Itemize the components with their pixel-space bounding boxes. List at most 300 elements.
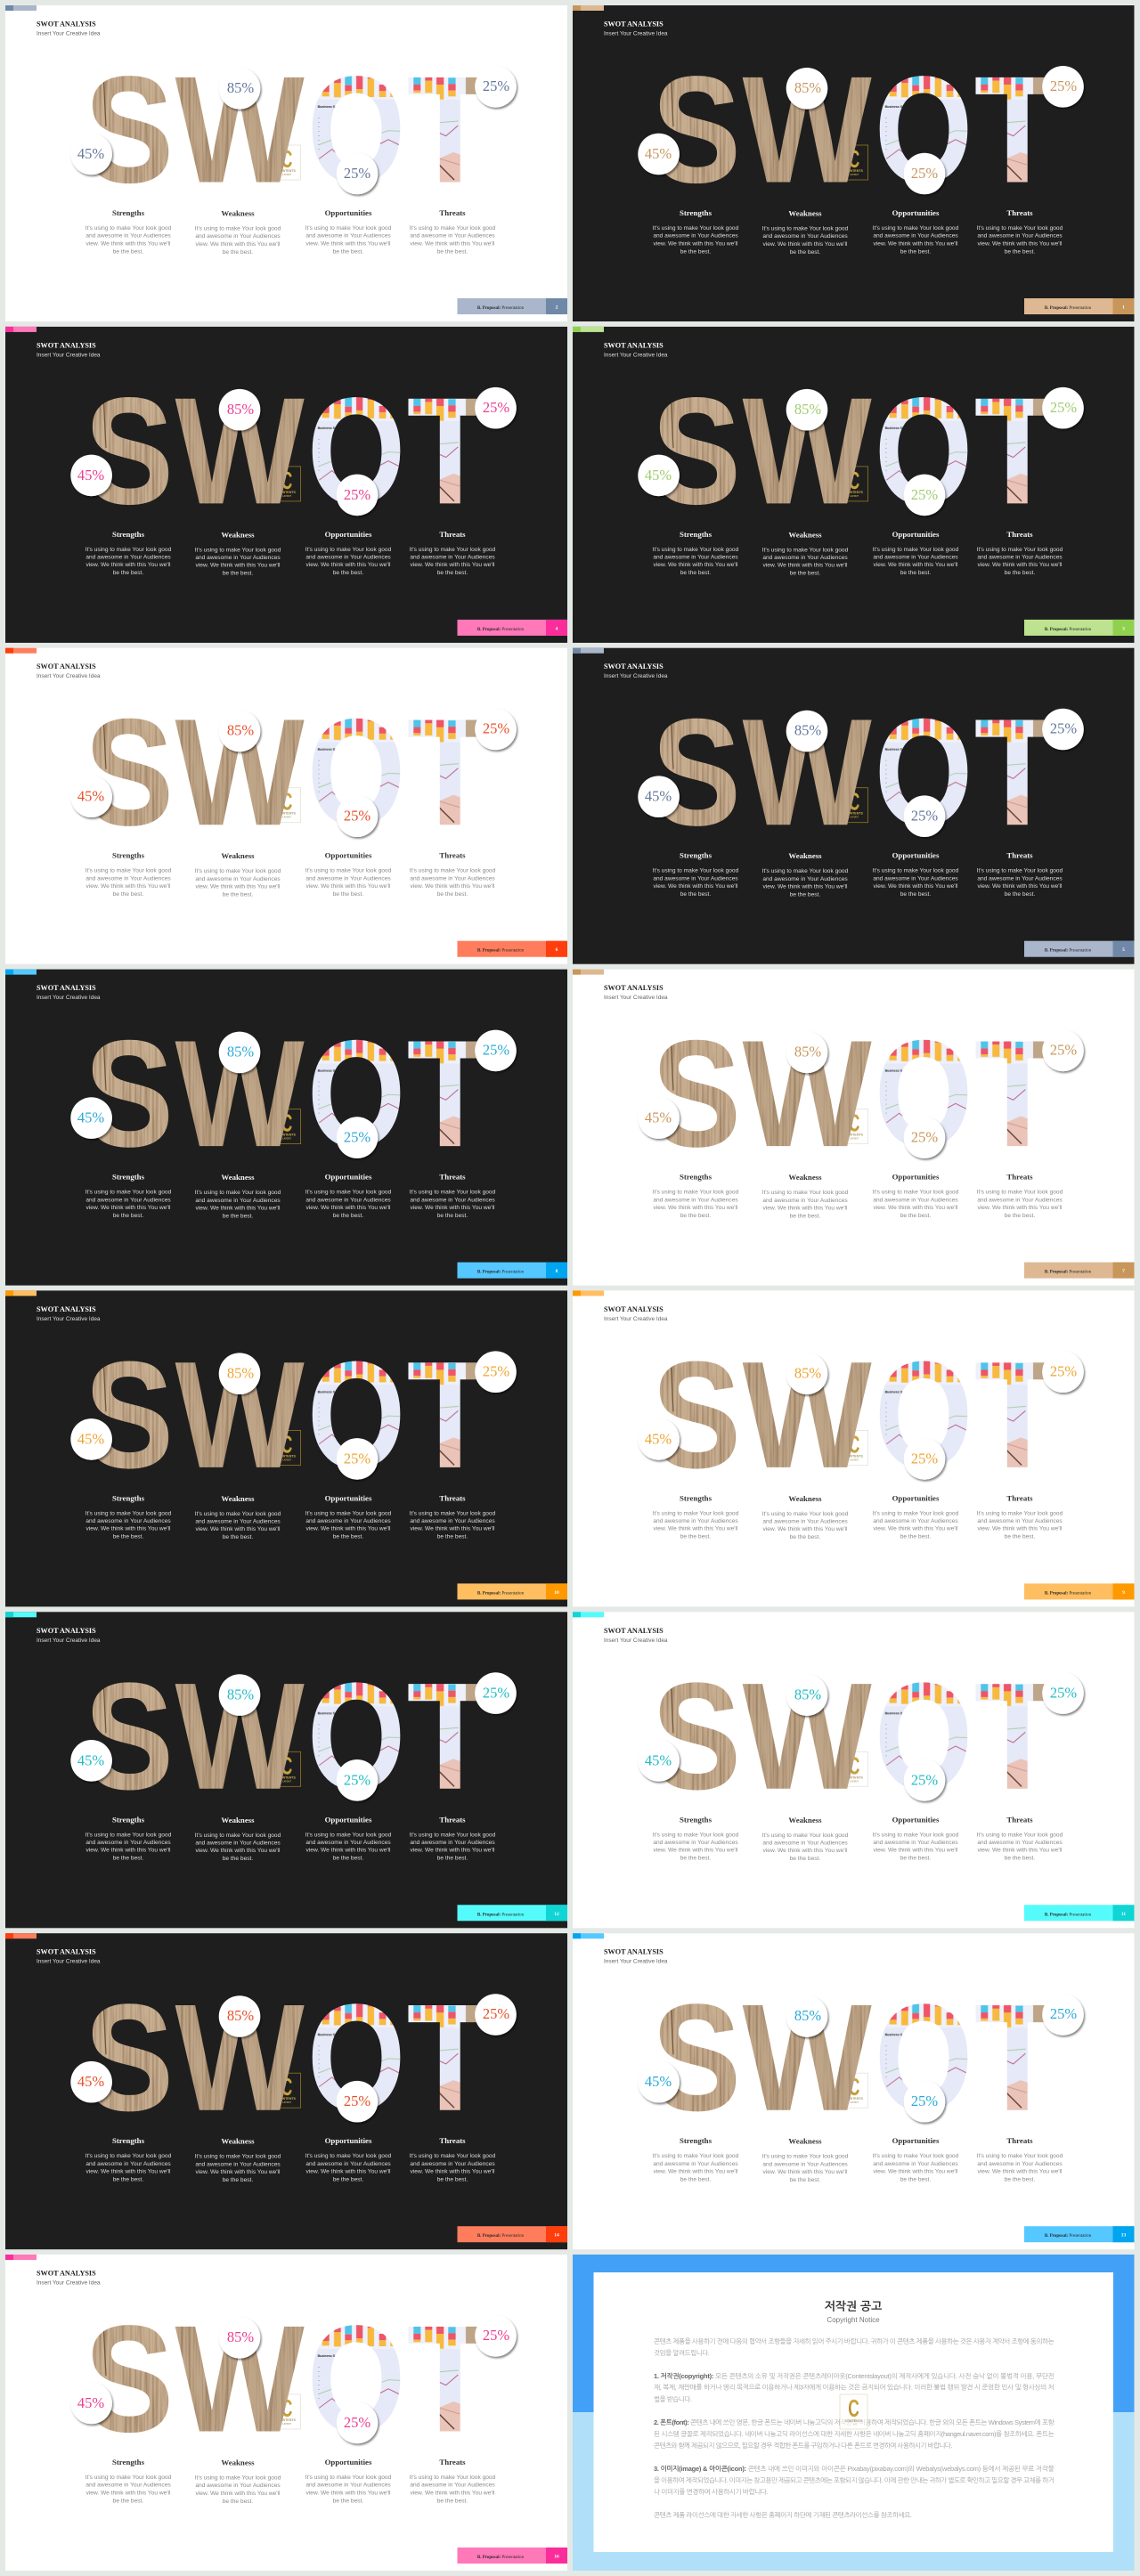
column: Opportunities [873,530,959,576]
footer tag [1024,2226,1135,2242]
column: Weakness: It's using to make Your look good [195,2475,281,2481]
SWOT letters: O [307,367,405,536]
footer tag [458,620,567,636]
column: Opportunities: Opportunities [325,1493,372,1502]
SWOT letters: W [175,1010,305,1179]
column: Threats: and awesome in Your Audiences [977,1197,1063,1203]
corner tag [5,648,37,654]
title: SWOT ANALYSIS [604,662,664,670]
intro paragraph: 콘텐츠 제품을 사용하기 전에 다음의 협약서 조항들을 자세히 읽어 주시기 바랍니다. 귀하가 이 콘텐츠 제품을 사용하는 것은 사용자 계약서 조항에 동의하는 [654,2337,1054,2345]
footer tag [1024,298,1135,314]
column: Opportunities: Opportunities [892,1173,940,1182]
column: Opportunities: be the best. [333,1534,363,1540]
circle: 45%: 45% [77,788,104,805]
column: Strengths: view. We think with this You we'll [86,883,171,890]
logo watermark: CONTENTS [278,812,296,816]
logo watermark: C [281,2394,292,2422]
circle: 85%: 85% [794,401,821,418]
column: Weakness [195,530,281,577]
column: Weakness [762,1173,849,1219]
column: Opportunities [305,1815,392,1862]
circle: 85%: 85% [227,1364,254,1381]
column: Strengths: be the best. [680,1856,711,1862]
SWOT letters: T [974,366,1061,536]
column: Threats [410,1493,496,1540]
column: Threats: Threats [439,1173,466,1182]
column: Weakness: be the best. [790,892,820,898]
circle: 25% [904,1117,945,1158]
SWOT letters: O [875,1010,973,1179]
column: Threats: It's using to make Your look good [977,2153,1063,2159]
circle: 85% [219,68,260,110]
column: Strengths: and awesome in Your Audiences [86,1840,171,1846]
column: Strengths: and awesome in Your Audiences [86,2483,171,2489]
column: Weakness: be the best. [790,1856,820,1862]
circle: 25%: 25% [483,2327,509,2344]
column: Weakness [762,1494,849,1540]
column: Opportunities: and awesome in Your Audiences [305,233,391,240]
logo watermark [841,1109,868,1144]
column: Opportunities: It's using to make Your look good [873,225,959,232]
column: Opportunities: view. We think with this You we'll [874,883,958,890]
circle: 85%: 85% [227,2007,254,2024]
column: Strengths: Strengths [112,851,145,860]
column: Threats: view. We think with this You we'll [411,562,495,568]
column: Strengths [653,208,739,255]
column: Threats [410,1815,496,1862]
column: Weakness: Weakness [788,1816,822,1824]
logo watermark: LAYOUT [282,2423,291,2426]
column: Opportunities: It's using to make Your look good [873,547,959,553]
column: Threats: Threats [1006,2136,1033,2145]
circle: 25%: 25% [344,2092,370,2109]
subtitle: Insert Your Creative Idea [37,30,101,37]
title: SWOT ANALYSIS [37,2269,96,2278]
title: SWOT ANALYSIS [604,341,664,349]
column: Threats: and awesome in Your Audiences [410,2483,495,2489]
column: Weakness: and awesome in Your Audiences [762,1841,848,1847]
column: Strengths: be the best. [113,1534,143,1540]
panel: slide 10 white amber [573,1290,1135,1606]
column: Opportunities: and awesome in Your Audiences [873,875,958,882]
SWOT letters [85,687,493,857]
circle: 85% [786,68,827,110]
circle: 45%: 45% [77,467,104,484]
footer tag [1024,941,1135,957]
circle: 25% [337,2081,378,2123]
logo watermark: LAYOUT [850,817,859,819]
column: Opportunities: be the best. [900,1534,931,1540]
circle: 45% [70,1418,112,1460]
circle: 85%: 85% [794,1044,821,1060]
column: Weakness: and awesome in Your Audiences [762,555,848,561]
column: Threats: and awesome in Your Audiences [977,1518,1063,1524]
column: Strengths: and awesome in Your Audiences [86,2161,171,2167]
circle: 45%: 45% [645,1109,672,1126]
column: Threats: be the best. [437,570,468,576]
column: Weakness: Weakness [788,2137,822,2146]
column: Threats [410,851,496,898]
column: Weakness: view. We think with this You we'll [763,1205,848,1211]
SWOT letters [85,366,493,537]
footer tag: 1 [1122,305,1125,310]
column: Weakness: It's using to make Your look good [762,1511,849,1517]
column: Weakness: view. We think with this You we'll [763,241,848,248]
column: Opportunities: Opportunities [325,851,372,860]
SWOT letters: O [307,1652,405,1822]
column: Weakness [195,1816,281,1862]
circle: 25%: 25% [911,2092,938,2109]
column: Weakness: It's using to make Your look good [195,547,281,553]
column: Threats: Threats [1006,851,1033,860]
column: Opportunities: It's using to make Your look good [305,2153,392,2159]
circle: 45%: 45% [645,2073,672,2090]
circle: 85% [219,1995,260,2037]
intro paragraph [654,2337,1054,2357]
column: Weakness: Weakness [788,530,822,539]
SWOT letters: T [407,45,493,215]
column: Strengths: be the best. [113,570,143,576]
column: Threats: be the best. [1005,570,1035,576]
SWOT letters [85,1009,493,1179]
column: Opportunities: It's using to make Your look good [305,1190,392,1196]
column: Strengths: It's using to make Your look good [86,1190,172,1196]
circle: 25% [475,2315,517,2357]
circle: 45%: 45% [645,467,672,484]
intro paragraph: 것임을 알려드립니다. [654,2349,710,2357]
SWOT letters: W [743,45,872,215]
circle: 25%: 25% [911,1771,938,1788]
SWOT letters: W [175,45,305,215]
circle: 25%: 25% [344,808,370,825]
logo watermark: C [849,145,859,173]
circle: 25% [904,153,945,194]
column: Weakness: and awesome in Your Audiences [762,233,848,240]
footer tag: 5 [1122,947,1125,953]
column: Weakness: be the best. [790,249,820,256]
subtitle: Insert Your Creative Idea [37,1959,101,1965]
circle: 25%: 25% [1050,1684,1077,1701]
column: Threats: Threats [439,1493,466,1502]
column: Threats: It's using to make Your look good [977,1190,1063,1196]
column: Threats: be the best. [1005,1856,1035,1862]
footer tag: 11 [1121,1912,1126,1917]
circle: 45%: 45% [77,145,104,162]
column: Weakness: Weakness [788,851,822,860]
column: Weakness [762,208,849,256]
column: Opportunities: Opportunities [325,530,372,539]
column: Threats: view. We think with this You we'll [978,1205,1063,1211]
logo watermark: C [281,145,292,173]
subtitle: Insert Your Creative Idea [37,2279,101,2287]
column: Strengths: view. We think with this You we'll [86,2168,171,2174]
SWOT letters [85,45,493,215]
column: Weakness: view. We think with this You we'll [196,2491,281,2497]
column: Strengths: It's using to make Your look good [86,1832,172,1838]
column: Strengths: It's using to make Your look good [86,1510,172,1516]
column: Threats: view. We think with this You we'll [411,2490,495,2496]
SWOT letters [85,1330,493,1500]
footer tag [458,2226,567,2242]
column: Weakness [762,851,849,898]
column: Strengths: It's using to make Your look good [86,2153,172,2159]
circle: 45%: 45% [645,145,672,162]
circle: 25% [475,66,517,108]
column: Opportunities: view. We think with this You we'll [306,240,391,247]
circle: 45% [638,455,680,496]
SWOT letters: O [875,1330,973,1500]
SWOT letters: S [85,45,174,215]
column: Strengths: view. We think with this You we'll [654,883,738,890]
column: Strengths: view. We think with this You we'll [86,2490,171,2496]
column: Weakness: view. We think with this You we'll [196,1205,281,1211]
SWOT letters [85,1651,493,1822]
column: Weakness: be the best. [790,2177,820,2183]
column: Threats: and awesome in Your Audiences [977,2161,1063,2167]
column: Weakness: Weakness [221,1494,255,1503]
circle: 45%: 45% [645,1751,672,1768]
circle: 25% [337,1117,378,1158]
circle: 45% [638,1097,680,1139]
logo watermark: LAYOUT [282,1780,291,1783]
logo watermark: C [281,1430,292,1458]
SWOT letters: W [743,1973,872,2142]
footer tag: 7 [1122,1269,1125,1274]
column: Opportunities: It's using to make Your look good [305,2474,392,2481]
logo watermark: C [849,1430,859,1458]
SWOT letters [652,45,1061,215]
column: Threats: Threats [1006,1493,1033,1502]
column: Threats: view. We think with this You we'll [978,2168,1063,2174]
subheading: Copyright Notice [826,2316,880,2324]
circle: 25%: 25% [911,165,938,182]
circle: 25%: 25% [344,486,370,503]
column: Opportunities: Opportunities [325,2458,372,2466]
column: Opportunities: and awesome in Your Audiences [873,555,958,561]
column: Weakness: Weakness [788,1494,822,1503]
column: Weakness: be the best. [223,1856,253,1862]
column: Opportunities: view. We think with this You we'll [306,1848,391,1854]
column: Opportunities: and awesome in Your Audiences [305,555,391,561]
footer tag [458,1905,567,1921]
title: SWOT ANALYSIS [37,1948,96,1956]
logo watermark: CONTENTS [845,2097,863,2101]
footer tag: 3 [1122,626,1125,631]
column: Weakness [195,1494,281,1540]
SWOT letters: S [652,1652,741,1822]
column: Weakness: and awesome in Your Audiences [195,876,281,882]
SWOT letters: W [175,1652,305,1822]
logo watermark [273,467,301,501]
paragraph: font: 된 시스템 글꼴로 제작되었습니다. 네이버 나눔고딕 라이선스에 대한 자세한 사항은 네이버 나눔고딕 홈페이지(hangeul.naver.com)를 참조하세요. 폰트는 [654,2430,1054,2438]
SWOT letters: S [652,1973,741,2143]
SWOT letters: S [85,1009,174,1179]
column: Threats [977,208,1063,255]
column: Opportunities: view. We think with this You we'll [874,240,958,247]
column: Threats: be the best. [1005,1213,1035,1219]
SWOT letters: W [175,2295,305,2464]
column: Opportunities: be the best. [333,891,363,898]
column: Weakness [762,1816,849,1862]
column: Opportunities: and awesome in Your Audiences [305,2161,391,2167]
column: Opportunities: Opportunities [892,208,940,217]
column: Weakness: It's using to make Your look good [195,868,281,874]
logo watermark: C [281,1109,292,1137]
footer tag: 12 [554,1912,559,1917]
column: Weakness: and awesome in Your Audiences [195,1198,281,1204]
column: Strengths [653,1815,739,1862]
column: Threats: Threats [439,208,466,217]
column: Opportunities: be the best. [900,2176,931,2182]
circle: 25% [475,1030,517,1071]
logo watermark [273,1109,301,1144]
circle: 25%: 25% [1050,77,1077,94]
circle: 25% [337,475,378,516]
panel: slide 8 white tan [573,970,1135,1286]
circle: 45%: 45% [77,1109,104,1126]
column: Opportunities [305,530,392,576]
paragraph: image and icon: 3. 이미지(image) & 아이콘(icon): 콘텐츠 내에 쓰인 이미지와 아이콘은 Pixabay(pixabay.com)와 Webalys(webalys.com) 등에서 제공된 무료 저작물 [654,2465,1054,2473]
logo watermark: CONTENTS [278,1454,296,1458]
column: Weakness: be the best. [223,892,253,898]
panel: slide 15 white pink [5,2255,567,2571]
column: Threats: view. We think with this You we'll [978,562,1063,568]
column: Weakness: It's using to make Your look good [195,1511,281,1517]
column: Threats [977,1815,1063,1862]
column: Weakness: view. We think with this You we'll [196,1848,281,1854]
column: Strengths: It's using to make Your look good [86,2474,172,2481]
circle: 25%: 25% [344,1129,370,1146]
column: Opportunities: It's using to make Your look good [873,2153,959,2159]
column: Weakness: It's using to make Your look good [762,2154,849,2160]
column: Opportunities: and awesome in Your Audiences [873,1840,958,1846]
column: Opportunities: and awesome in Your Audiences [305,875,391,882]
column: Threats: view. We think with this You we'll [978,1848,1063,1854]
column: Threats: It's using to make Your look good [410,1190,496,1196]
logo watermark: CONTENTS [845,1454,863,1458]
SWOT letters: W [175,688,305,857]
footer tag: B. Proposal: Presentation [477,2556,525,2560]
footer tag: B. Proposal: Presentation [1045,306,1092,311]
column: Threats: Threats [439,851,466,860]
circle: 25% [904,1759,945,1801]
column: Strengths: Strengths [112,530,145,539]
footer tag [1024,620,1135,636]
SWOT letters: W [743,1652,872,1822]
column: Opportunities [305,1173,392,1219]
column: Threats: and awesome in Your Audiences [410,2161,495,2167]
logo watermark: CONTENTS [845,1134,863,1137]
panel: slide 3 dark pink [5,327,567,643]
column: Opportunities: be the best. [900,248,931,255]
column: Threats: Threats [439,2136,466,2145]
footer tag: 13 [1121,2233,1126,2239]
column: Strengths: and awesome in Your Audiences [653,555,738,561]
column: Strengths: view. We think with this You we'll [654,1205,738,1211]
heading: copyright: 저작권 공고 [825,2299,882,2313]
column: Threats: and awesome in Your Audiences [977,233,1063,240]
logo watermark: C [281,1751,292,1779]
column: Strengths [653,1493,739,1540]
circle: 45% [638,1418,680,1460]
column: Opportunities: be the best. [333,570,363,576]
column: Threats: be the best. [1005,2176,1035,2182]
column: Weakness [195,2458,281,2505]
column: Threats: It's using to make Your look good [410,1510,496,1516]
panel: slide 4 dark green [573,327,1135,643]
column: Weakness: view. We think with this You we'll [763,883,848,890]
column: Weakness: It's using to make Your look good [762,1832,849,1839]
corner tag [5,1290,37,1296]
circle: 25% [337,1438,378,1480]
column: Strengths: view. We think with this You we'll [86,240,171,247]
circle: 25% [475,387,517,429]
footer tag: B. Proposal: Presentation [477,949,525,954]
column: Strengths [86,851,172,898]
circle: 25%: 25% [483,2005,509,2022]
column: Weakness: be the best. [223,1534,253,1540]
SWOT letters: T [974,1330,1061,1499]
column: Strengths: be the best. [680,570,711,576]
circle: 85%: 85% [794,2007,821,2024]
column: Strengths [653,1173,739,1219]
SWOT letters: S [85,1973,174,2143]
circle: 25%: 25% [1050,720,1077,737]
column: Weakness: be the best. [790,1534,820,1540]
circle: 25%: 25% [911,1450,938,1467]
column: Strengths: be the best. [680,1534,711,1540]
logo watermark [840,2394,867,2429]
SWOT letters [652,1330,1061,1500]
column: Threats: view. We think with this You we'll [411,2168,495,2174]
column: Threats [410,208,496,255]
column: Threats: and awesome in Your Audiences [410,1840,495,1846]
column: Strengths: view. We think with this You we'll [86,562,171,568]
circle: 45% [70,2061,112,2103]
corner tag [573,970,604,975]
circle: 25% [337,153,378,194]
column: Weakness: view. We think with this You we'll [196,2169,281,2175]
SWOT letters [652,366,1061,537]
column: Opportunities: It's using to make Your look good [873,868,959,874]
circle: 85%: 85% [227,79,254,96]
subtitle: Insert Your Creative Idea [37,1637,101,1644]
column: Weakness: be the best. [223,571,253,577]
column: Threats [977,530,1063,576]
column: Threats: be the best. [437,248,468,255]
column: Threats: be the best. [1005,248,1035,255]
circle: 25% [1042,387,1084,429]
circle: 25% [904,795,945,837]
column: Threats: and awesome in Your Audiences [410,875,495,882]
circle: 45% [70,776,112,817]
logo watermark: CONTENTS [278,1776,296,1779]
column: Threats: Threats [1006,1173,1033,1182]
column: Weakness: be the best. [790,571,820,577]
logo watermark: C [281,2073,292,2101]
column: Threats: Threats [439,2458,466,2466]
column: Threats: view. We think with this You we'll [411,240,495,247]
logo watermark: LAYOUT [282,1459,291,1461]
column: Strengths: view. We think with this You we'll [654,1848,738,1854]
column: Opportunities: It's using to make Your look good [873,1190,959,1196]
SWOT letters: T [407,2294,493,2464]
footer tag [1024,1583,1135,1599]
column: Strengths: and awesome in Your Audiences [653,2161,738,2167]
circle: 25%: 25% [483,720,509,737]
column: Opportunities [305,1493,392,1540]
column: Opportunities: be the best. [333,2498,363,2504]
